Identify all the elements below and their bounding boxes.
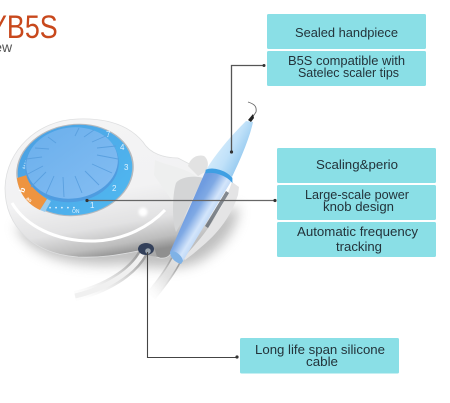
- device shadow: [15, 205, 238, 268]
- cable port: [138, 244, 157, 257]
- product illustration: ultrasonic scaler: b: [17, 186, 27, 194]
- dial numbers: MAX: [22, 158, 32, 170]
- LED highlight: [138, 208, 148, 216]
- dial numbers: [22, 130, 129, 215]
- dial numbers: 1: [90, 201, 95, 210]
- callout: frequency tracking: tracking: [336, 239, 382, 254]
- orange scale segment: [17, 175, 47, 210]
- callout: power knob: Large-scale power: [305, 187, 410, 202]
- callout: sealed handpiece: [267, 14, 426, 49]
- dial numbers: 7: [106, 130, 111, 139]
- product illustration: ultrasonic scaler: [5, 102, 256, 296]
- callout: silicone cable: [240, 338, 399, 374]
- knob grip ridges: [26, 128, 118, 197]
- callout: power knob: [277, 185, 436, 220]
- dial numbers: 3: [124, 163, 129, 172]
- leader line: power knob: [85, 199, 277, 202]
- scaler tip: [248, 102, 256, 121]
- callout: frequency tracking: Automatic frequency: [297, 224, 418, 239]
- cables: [75, 253, 176, 296]
- handpiece tip cone: [206, 121, 253, 177]
- callout: power knob: knob design: [323, 199, 394, 214]
- callout: compatible tips: [267, 51, 426, 86]
- callout: silicone cable: cable: [306, 354, 338, 369]
- leader line: silicone cable: [148, 252, 239, 359]
- callout: sealed handpiece: Sealed handpiece: [295, 25, 398, 40]
- handpiece: [170, 169, 232, 262]
- callout: silicone cable: Long life span silicone: [255, 342, 385, 357]
- callout: scaling and perio: Scaling&perio: [316, 157, 398, 172]
- product illustration: ultrasonic scaler: • • • • •: [49, 206, 76, 212]
- dial numbers: 4: [120, 143, 125, 152]
- callout: compatible tips: B5S compatible with: [288, 53, 405, 68]
- dial numbers: ON: [72, 209, 80, 215]
- product illustration: ultrasonic scaler: as: [25, 196, 33, 204]
- handpiece grip slot: [205, 191, 229, 228]
- blue collar: [206, 169, 232, 182]
- leader line: sealed handpiece and tips: [230, 64, 266, 154]
- handpiece cradle: [173, 177, 203, 232]
- callout: scaling and perio: [277, 148, 436, 183]
- callout: compatible tips: Satelec scaler tips: [298, 65, 399, 80]
- device body: [5, 119, 208, 258]
- callout: frequency tracking: [277, 222, 436, 257]
- dial numbers: 2: [112, 184, 117, 193]
- power knob: [20, 122, 124, 208]
- dial ring: [10, 116, 140, 224]
